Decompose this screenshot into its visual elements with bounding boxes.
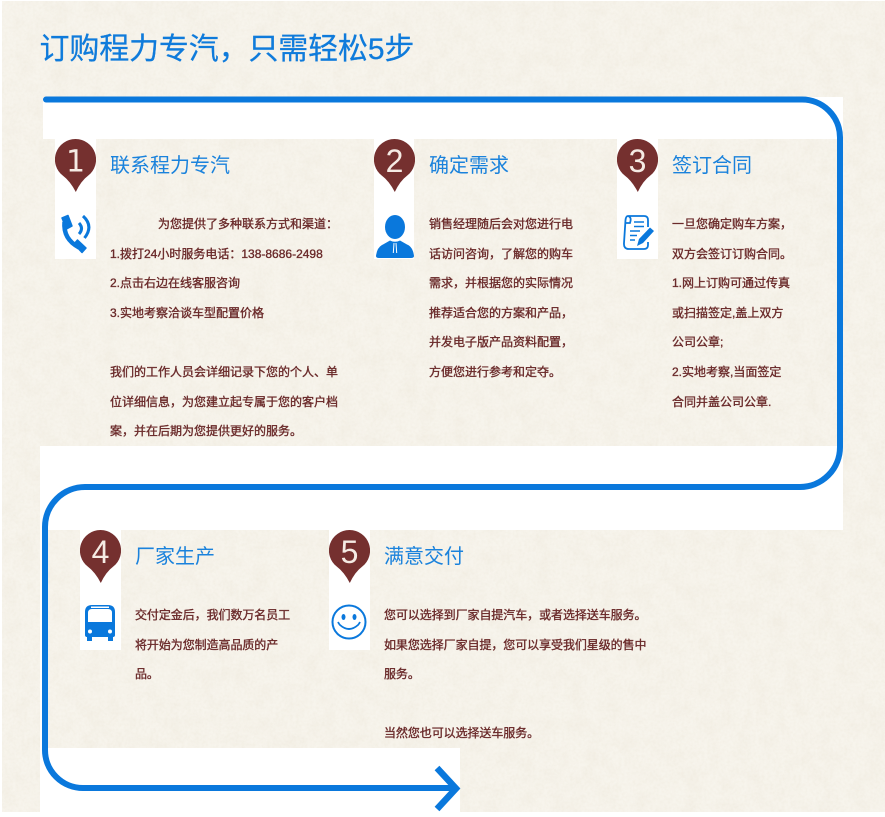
body text: 交付定金后，我们数万名员工 [135,608,290,622]
body text: 2.点击右边在线客服咨询 [110,276,240,290]
heading: 签订合同 [672,155,752,177]
panel: step 5 [329,530,646,740]
body text: 推荐适合您的方案和产品， [429,306,573,320]
body text: 公司公章; [672,335,723,349]
icon column: pin 4 and bus: 4 [92,534,109,570]
body text: 案，并在后期为您提供更好的服务。 [110,424,302,438]
body text: 位详细信息，为您建立起专属于您的客户档 [110,395,338,409]
white band behind bottom path [40,748,460,817]
panel: step 3 [617,139,792,409]
body text: 将开始为您制造高品质的产 [135,638,278,652]
body text [110,217,338,438]
body text: 当然您也可以选择送车服务。 [384,726,539,740]
body text: 3.实地考察洽谈车型配置价格 [110,306,264,320]
icon column: pin 2 and person: 2 [386,143,403,179]
panel: step 1 [55,139,338,438]
heading: 确定需求 [429,155,509,177]
body text: 如果您选择厂家自提，您可以享受我们星级的售中 [384,638,646,652]
body text: 双方会签订订购合同。 [672,247,792,261]
body text: 2.实地考察,当面签定 [672,365,781,379]
panel: step 2 [374,139,573,379]
body text: 需求，并根据您的实际情况 [429,276,573,290]
body text: 一旦您确定购车方案， [672,217,792,231]
title: 订购程力专汽，只需轻松5步 [40,33,414,66]
body text: 品。 [135,667,159,681]
body text: 或扫描签定,盖上双方 [672,306,783,320]
body text: 并发电子版产品资料配置， [429,335,573,349]
body text: 我们的工作人员会详细记录下您的个人、单 [110,365,338,379]
heading: 满意交付 [384,546,464,568]
icon column: pin 1 and phone [55,139,96,259]
body text [384,608,646,740]
white band left of lower section [40,530,45,748]
icon column: pin 2 and person [374,139,414,259]
body text [429,217,573,379]
body text: 您可以选择到厂家自提汽车，或者选择送车服务。 [384,608,646,622]
white band behind middle path [40,446,843,530]
body text [672,217,792,409]
body text [135,608,290,681]
white band behind top path [43,97,843,139]
icon column: pin 4 and bus [80,530,121,650]
body text: 为您提供了多种联系方式和渠道： [158,217,338,231]
heading: 厂家生产 [135,546,215,568]
icon column: pin 5 and smile: 5 [341,534,358,570]
icon column: pin 5 and smile [329,530,370,650]
body text: 合同并盖公司公章. [672,395,771,409]
body text: 销售经理随后会对您进行电 [429,217,573,231]
heading: 联系程力专汽 [110,155,230,177]
body text: 话访问咨询，了解您的购车 [429,247,573,261]
body text: 方便您进行参考和定夺。 [429,365,561,379]
body text: 1.拨打24小时服务电话：138-8686-2498 [110,247,323,261]
icon column: pin 3 and contract: 3 [629,143,646,179]
icon column: pin 3 and contract [617,139,658,259]
body text: 1.网上订购可通过传真 [672,276,790,290]
panel: step 4 [80,530,290,681]
icon column: pin 1 and phone: 1 [66,144,85,180]
body text: 服务。 [384,667,420,681]
